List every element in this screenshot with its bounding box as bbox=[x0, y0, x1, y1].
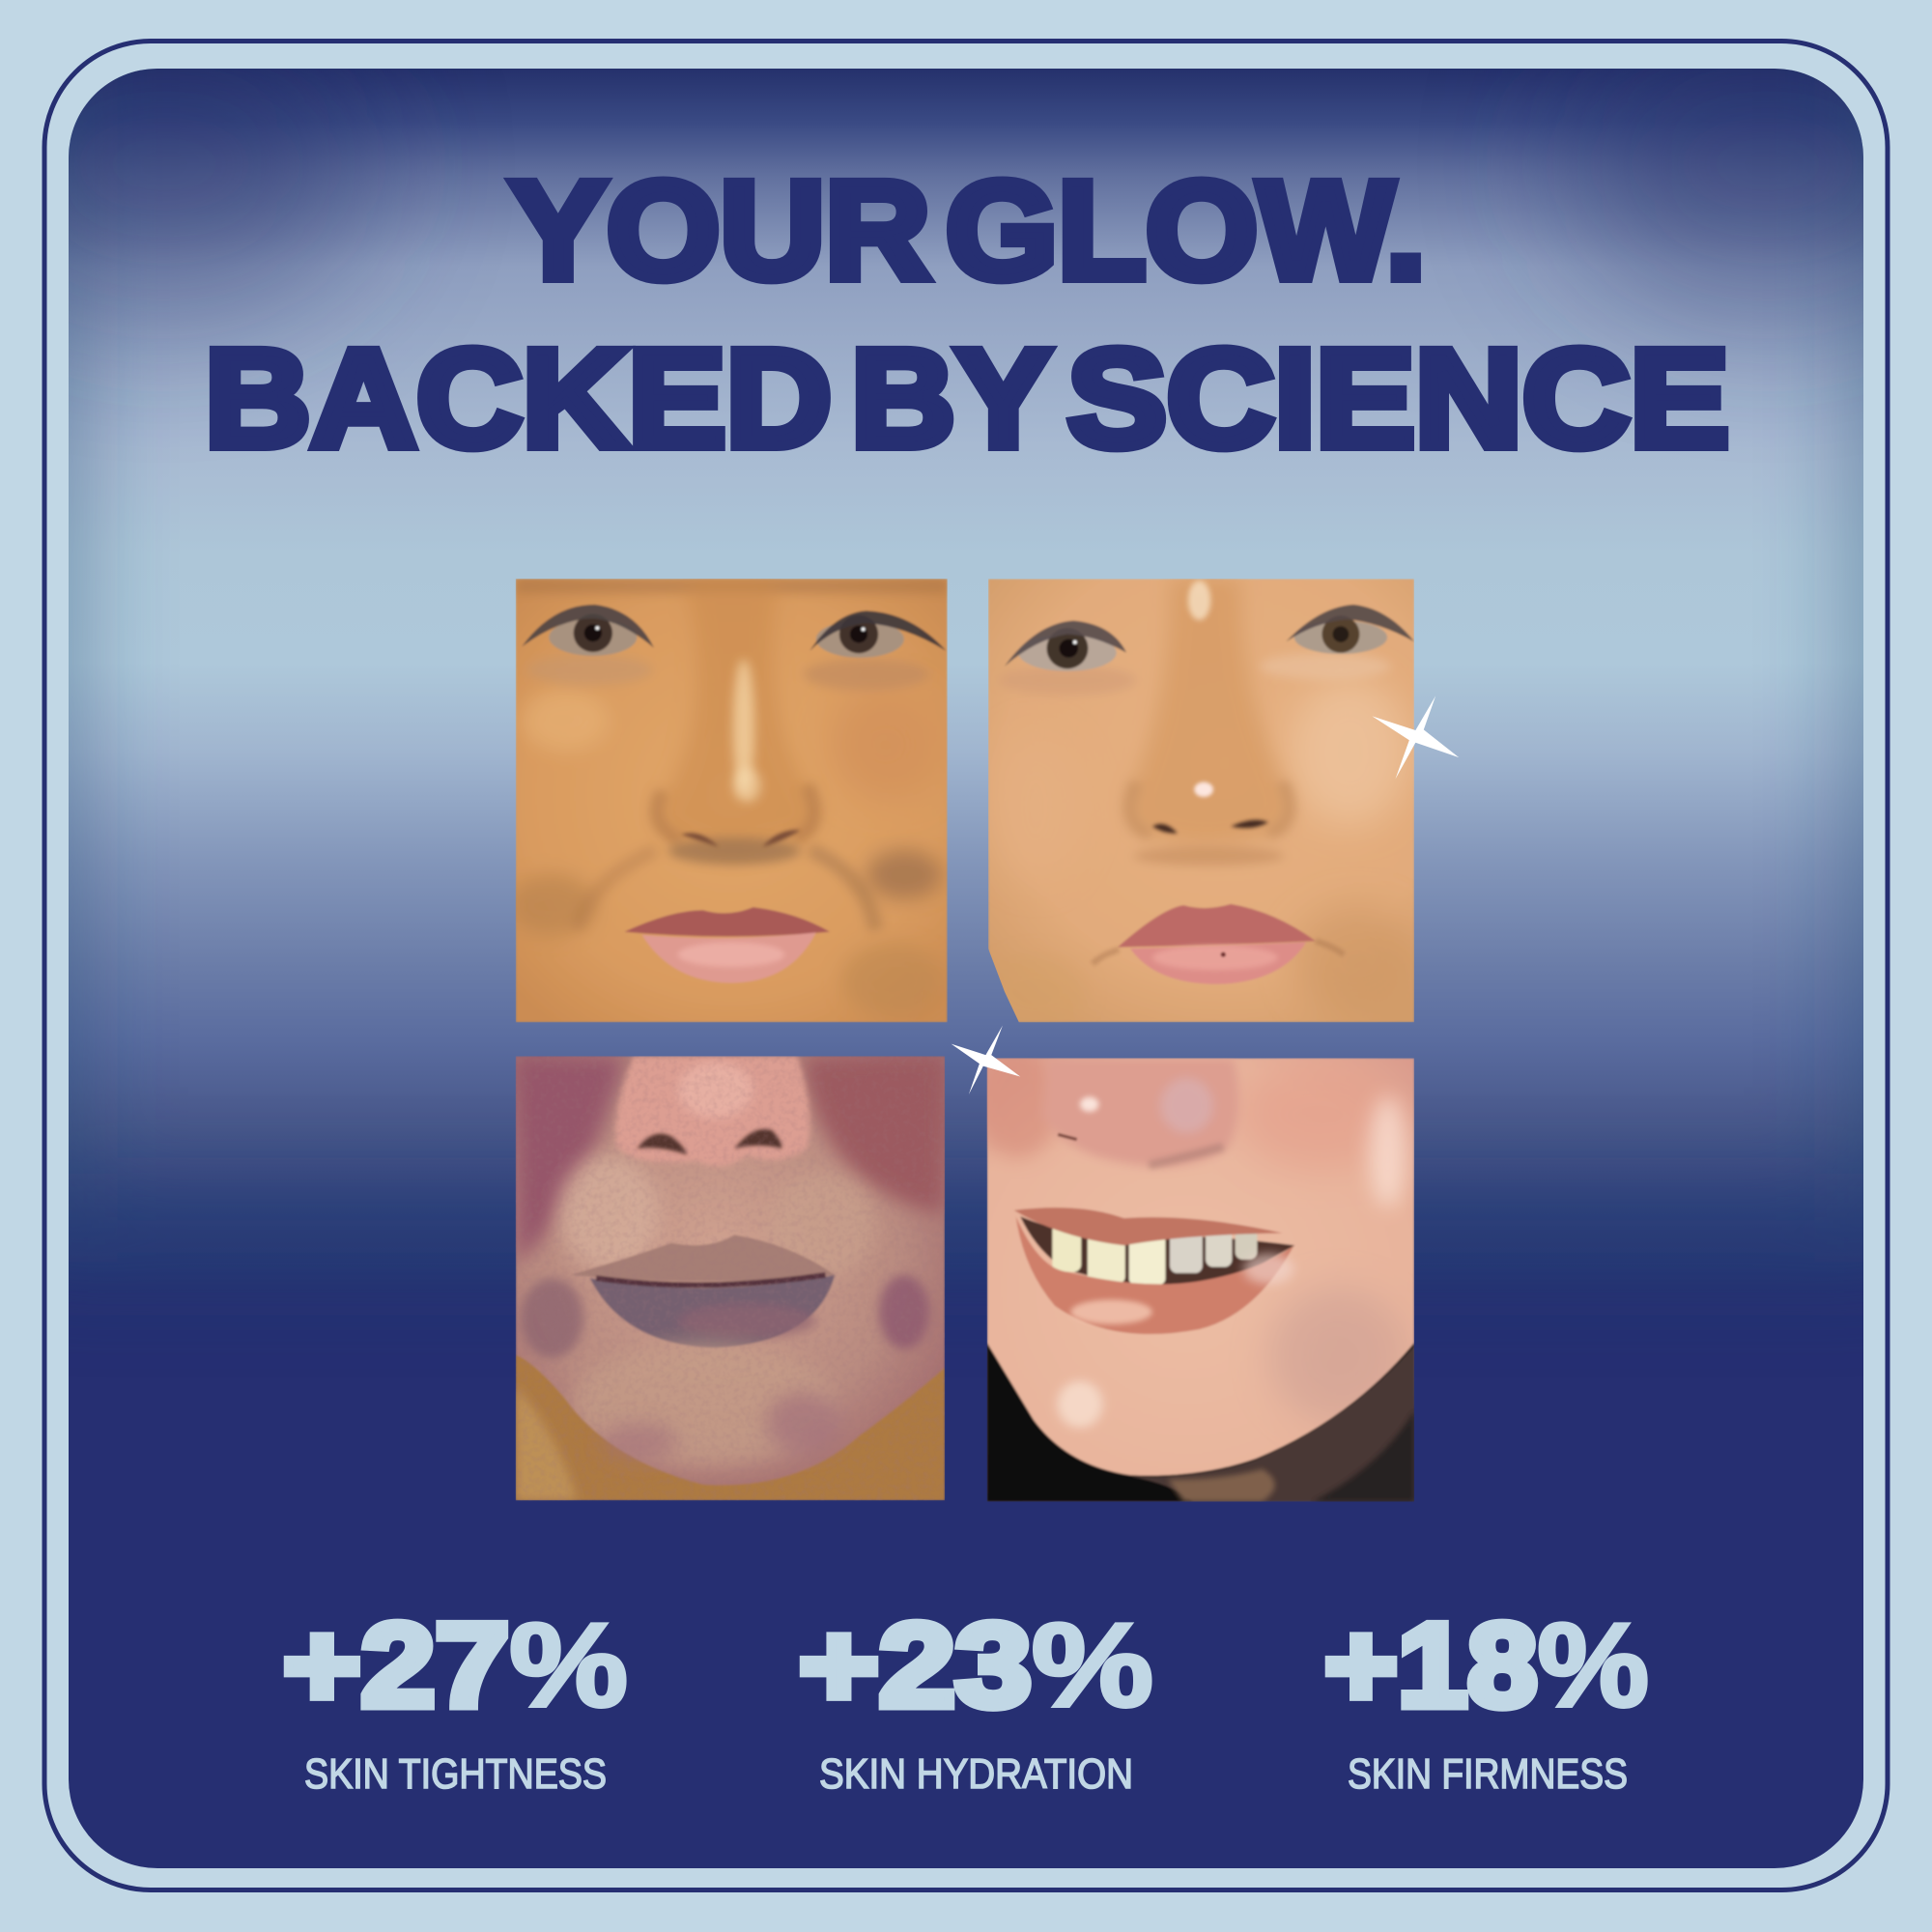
stat: skin hydration bbox=[799, 1600, 1153, 1798]
photo: after, lower face bbox=[973, 1047, 1414, 1502]
title: BACKED bbox=[205, 321, 832, 476]
title: YOUR bbox=[510, 153, 930, 308]
photo: after, upper face bbox=[985, 579, 1419, 1029]
mouth interior and teeth bbox=[1020, 1216, 1294, 1286]
title: GLOW. bbox=[946, 153, 1426, 308]
stat: skin firmness: +18% bbox=[1324, 1600, 1649, 1732]
title bbox=[205, 153, 1729, 476]
stat: skin hydration: SKIN HYDRATION bbox=[819, 1750, 1133, 1798]
stat: skin firmness: SKIN FIRMNESS bbox=[1348, 1750, 1628, 1798]
stat: skin tightness bbox=[283, 1600, 628, 1798]
photo: before, lower face bbox=[516, 1056, 945, 1500]
stat: skin hydration: +23 % bbox=[799, 1600, 1153, 1732]
title: SCIENCE bbox=[1067, 321, 1729, 476]
icon: sparkle centre bbox=[952, 1026, 1020, 1094]
before and after photo grid bbox=[508, 579, 1459, 1502]
icon: sparkle right bbox=[1372, 696, 1459, 779]
stat: skin tightness: +27% bbox=[283, 1600, 628, 1732]
stat: skin tightness: SKIN TIGHTNESS bbox=[304, 1750, 607, 1798]
title: BY bbox=[851, 321, 1051, 476]
photo: before, upper face bbox=[508, 579, 948, 1022]
stat: skin firmness bbox=[1324, 1600, 1649, 1798]
